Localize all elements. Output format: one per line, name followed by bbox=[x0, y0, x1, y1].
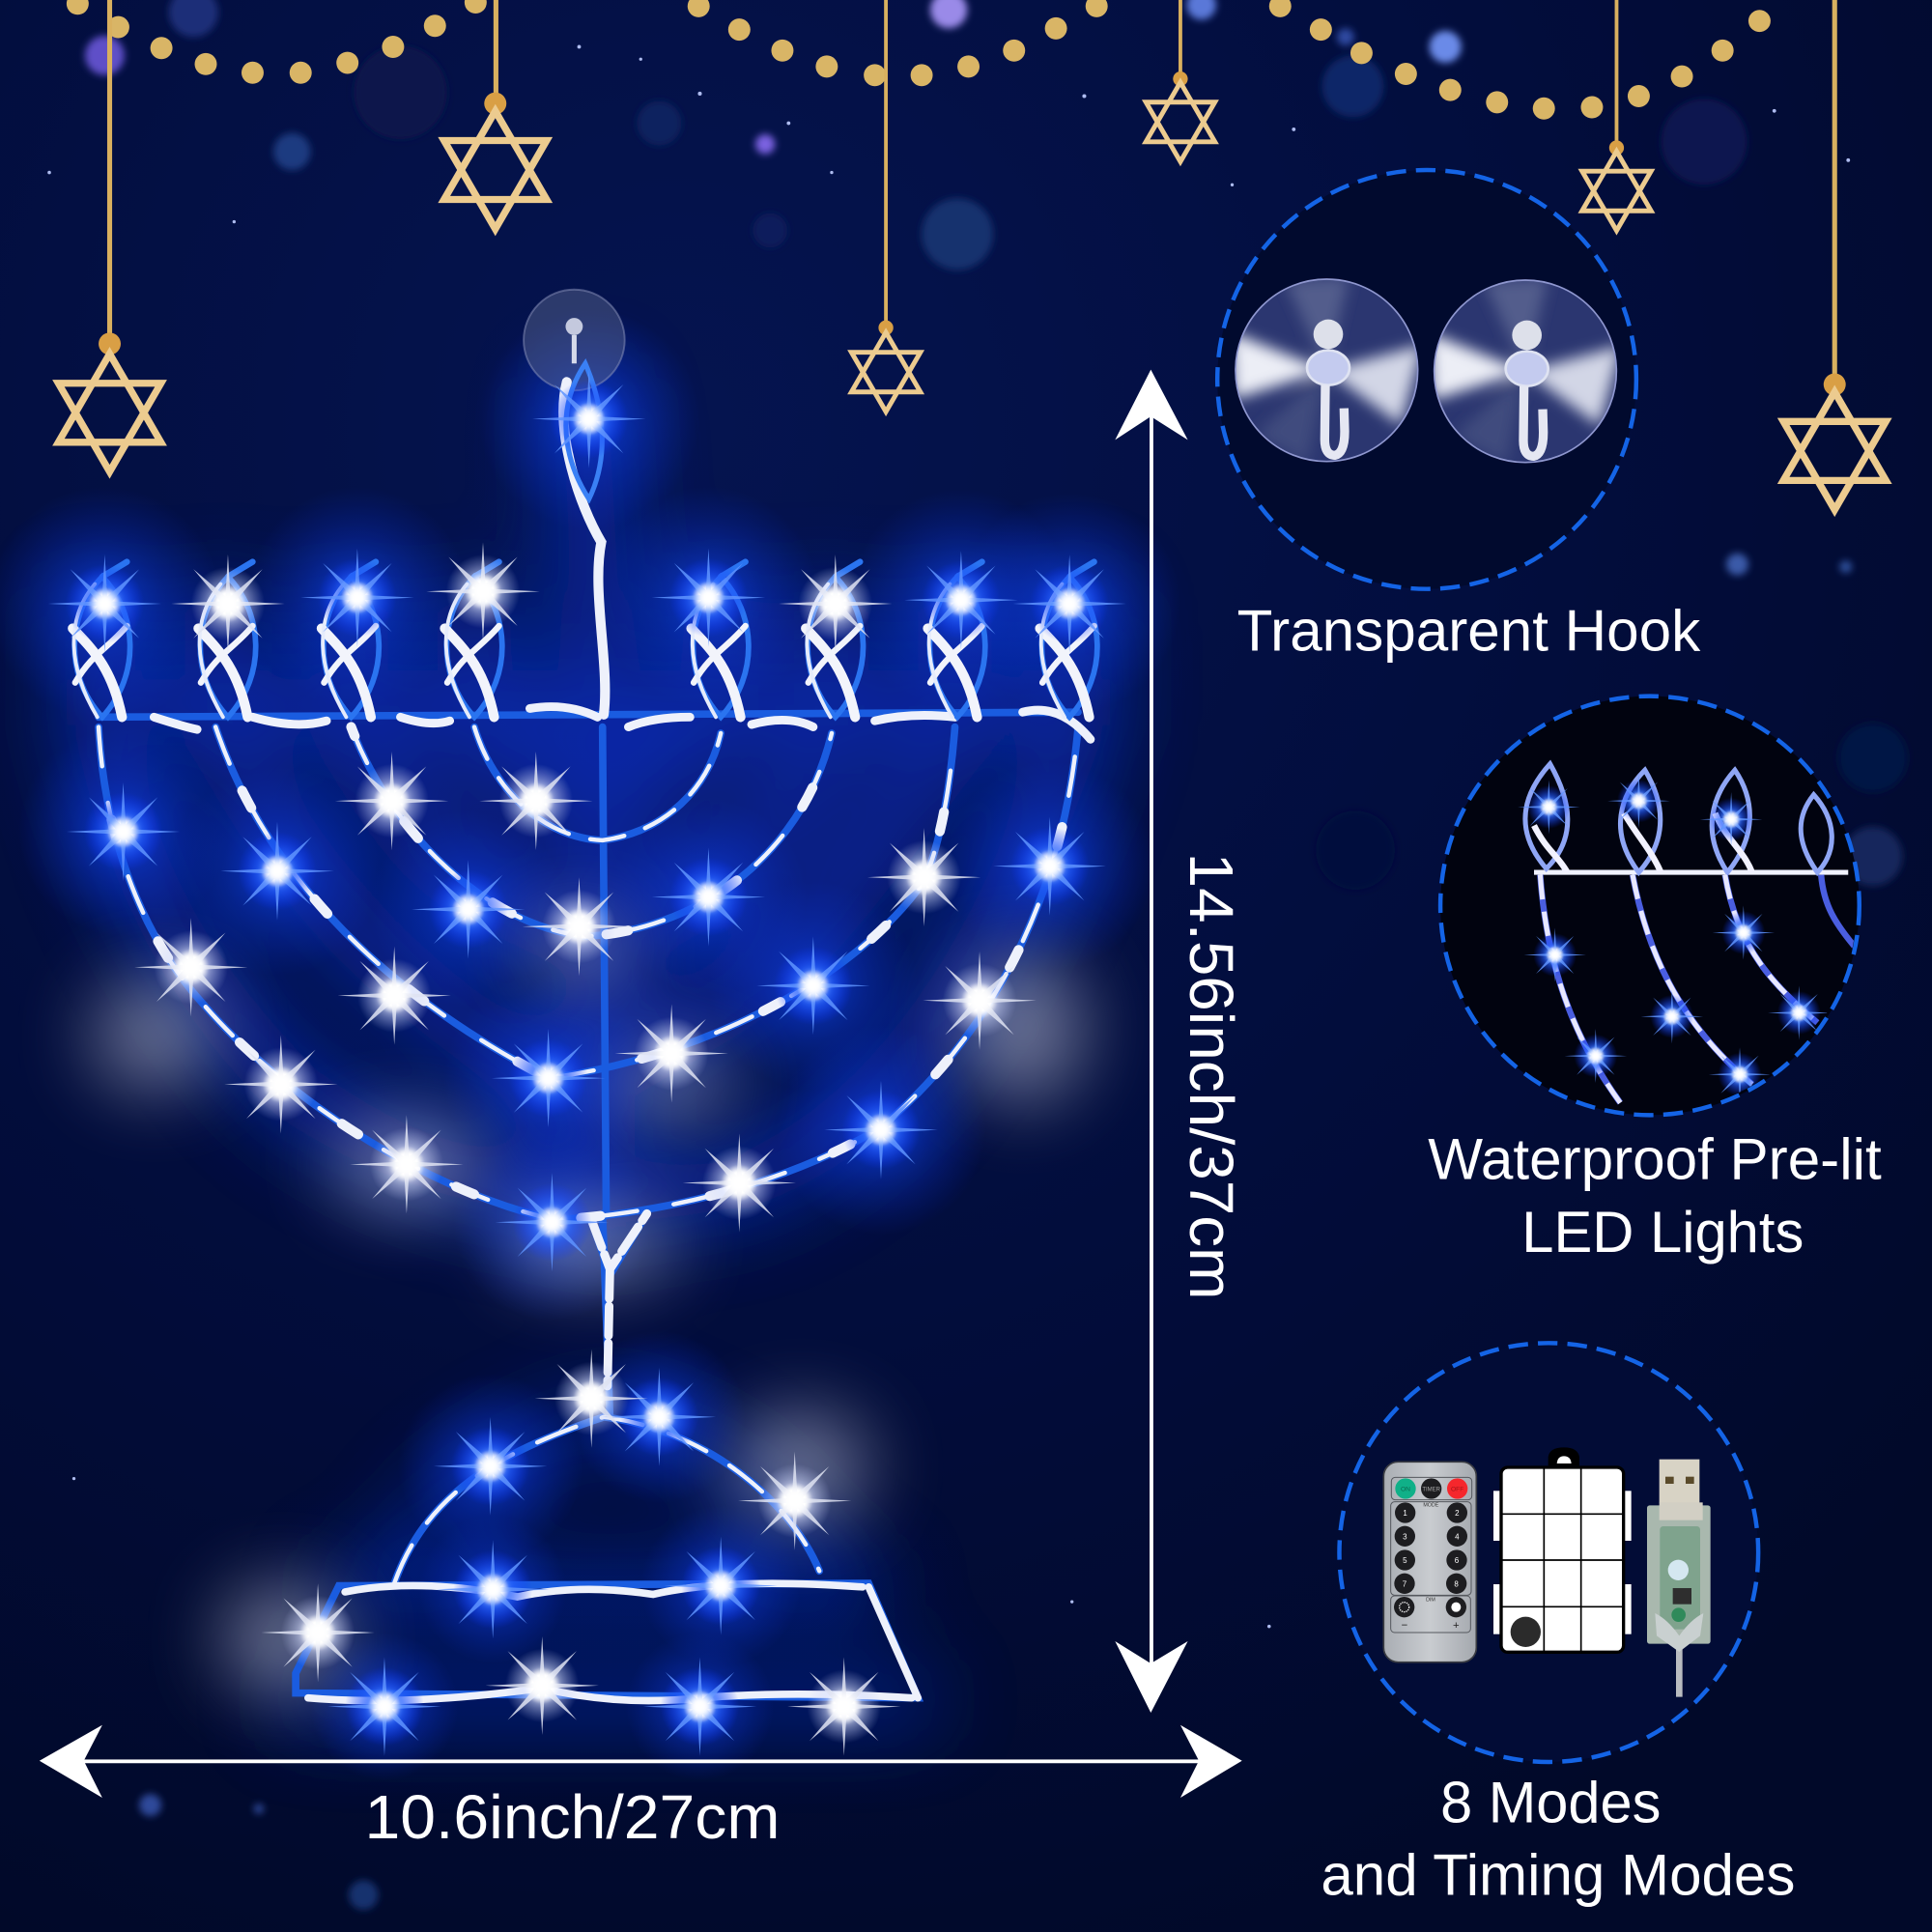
height label: 14.56inch/37cm bbox=[1177, 853, 1246, 1300]
hanging star 4 bbox=[1146, 0, 1215, 161]
remote control: DIM bbox=[1426, 1597, 1435, 1603]
modes label: 8 Modes bbox=[1440, 1770, 1661, 1834]
remote control: 1 bbox=[1403, 1509, 1407, 1518]
remote control: 8 bbox=[1454, 1579, 1459, 1588]
USB plug bbox=[1647, 1460, 1711, 1697]
remote control: 6 bbox=[1455, 1556, 1460, 1565]
remote control: 7 bbox=[1403, 1579, 1407, 1588]
remote control: MODE bbox=[1423, 1503, 1439, 1509]
panel: transparent hook bbox=[1217, 170, 1636, 589]
dashed circle bbox=[1339, 1343, 1758, 1762]
dashed circle bbox=[1440, 696, 1860, 1115]
top candle loop bbox=[566, 363, 602, 499]
dashed circle bbox=[1217, 170, 1636, 589]
LED label: LED Lights bbox=[1521, 1200, 1804, 1264]
remote control: TIMER bbox=[1422, 1487, 1441, 1492]
hanging star 5 bbox=[1582, 0, 1651, 231]
LED close-up bbox=[1518, 764, 1855, 1103]
LED lights: white sparkles bbox=[134, 542, 1037, 1756]
devices bbox=[1383, 1447, 1711, 1697]
candle loops row bbox=[72, 562, 1097, 717]
modes label: and Timing Modes bbox=[1321, 1843, 1795, 1908]
LED label: Waterproof Pre-lit bbox=[1428, 1127, 1882, 1192]
hook label: Transparent Hook bbox=[1237, 598, 1701, 663]
suction cup on menorah bbox=[524, 290, 625, 390]
remote control: ON bbox=[1401, 1486, 1410, 1492]
hanging star 3 bbox=[851, 0, 921, 412]
thick ribbons bbox=[99, 727, 1078, 1220]
remote control: OFF bbox=[1451, 1486, 1463, 1492]
remote control: 4 bbox=[1455, 1532, 1460, 1541]
white twisted wire bbox=[99, 382, 1091, 1700]
suction hooks bbox=[1230, 277, 1622, 465]
hanging star 2 bbox=[444, 0, 547, 229]
garland: gold beads left bbox=[67, 0, 487, 84]
blue wire frame bbox=[99, 712, 1078, 1698]
LED lights: blue sparkles bbox=[48, 370, 1126, 1756]
horizontal dimension arrow bbox=[40, 1725, 1242, 1798]
garland: gold beads centre bbox=[688, 0, 1108, 86]
remote control: 5 bbox=[1403, 1556, 1407, 1565]
menorah glow bbox=[0, 308, 1180, 1780]
panel: modes bbox=[1339, 1343, 1758, 1762]
remote control: 3 bbox=[1403, 1532, 1407, 1541]
width label: 10.6inch/27cm bbox=[365, 1782, 780, 1852]
battery box bbox=[1493, 1447, 1632, 1652]
garland: gold beads right bbox=[1269, 0, 1771, 120]
remote control bbox=[1383, 1462, 1476, 1662]
menorah frame bbox=[72, 363, 1097, 1700]
remote control: − bbox=[1402, 1620, 1408, 1632]
panel: waterproof LED close-up bbox=[1440, 696, 1860, 1115]
remote control: + bbox=[1453, 1620, 1460, 1632]
blue halos around lights bbox=[0, 308, 1180, 1780]
hanging star 1 bbox=[58, 0, 161, 471]
hanging star 6 bbox=[1783, 0, 1886, 510]
remote control: 2 bbox=[1455, 1509, 1460, 1518]
white haze bbox=[93, 918, 1084, 1694]
vertical dimension arrow bbox=[1115, 370, 1188, 1713]
